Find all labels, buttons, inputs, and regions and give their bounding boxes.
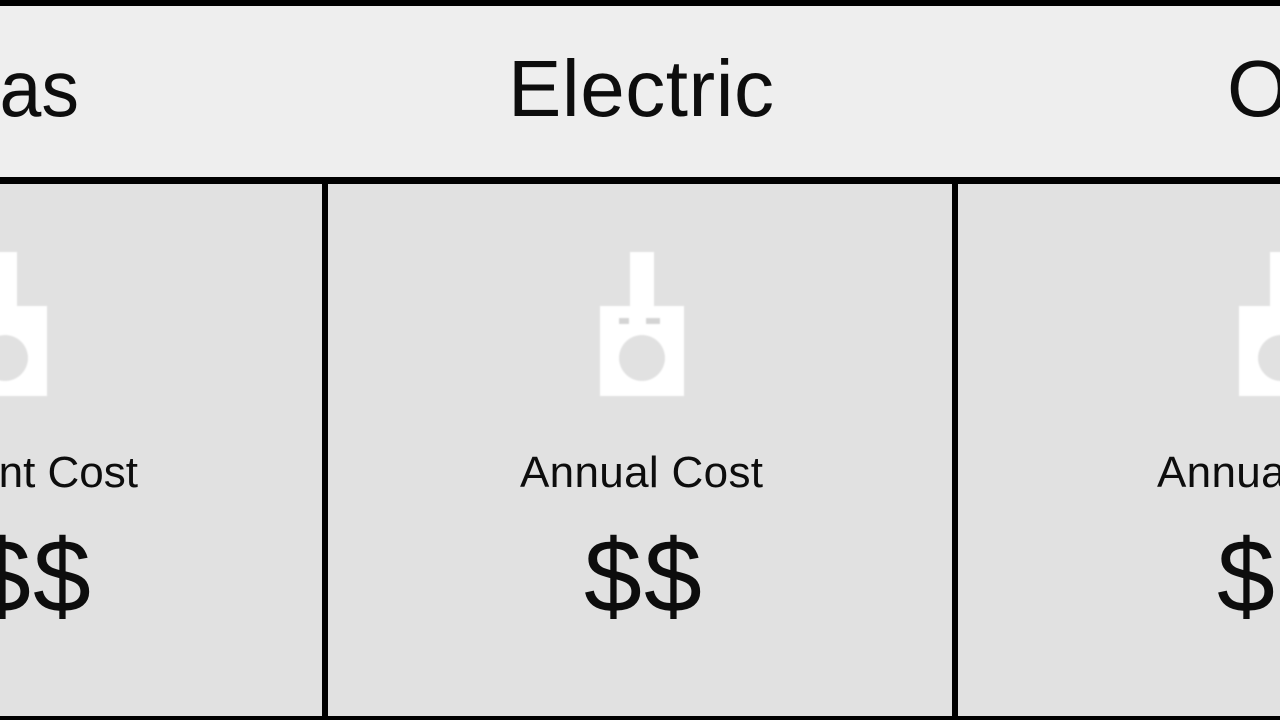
icon: oil heater xyxy=(1239,252,1280,396)
table rules xyxy=(0,184,1280,720)
icon: gas heater xyxy=(0,252,47,396)
panel: gas xyxy=(0,184,322,716)
heading: Electric: Electric xyxy=(508,44,774,133)
panel: oil xyxy=(958,184,1280,716)
header band xyxy=(0,0,1280,184)
icon: electric heater xyxy=(600,252,684,396)
panel: electric xyxy=(328,184,952,716)
value: electric cost: $$ xyxy=(584,519,702,635)
label: annual cost: Annual Cost xyxy=(520,448,763,497)
